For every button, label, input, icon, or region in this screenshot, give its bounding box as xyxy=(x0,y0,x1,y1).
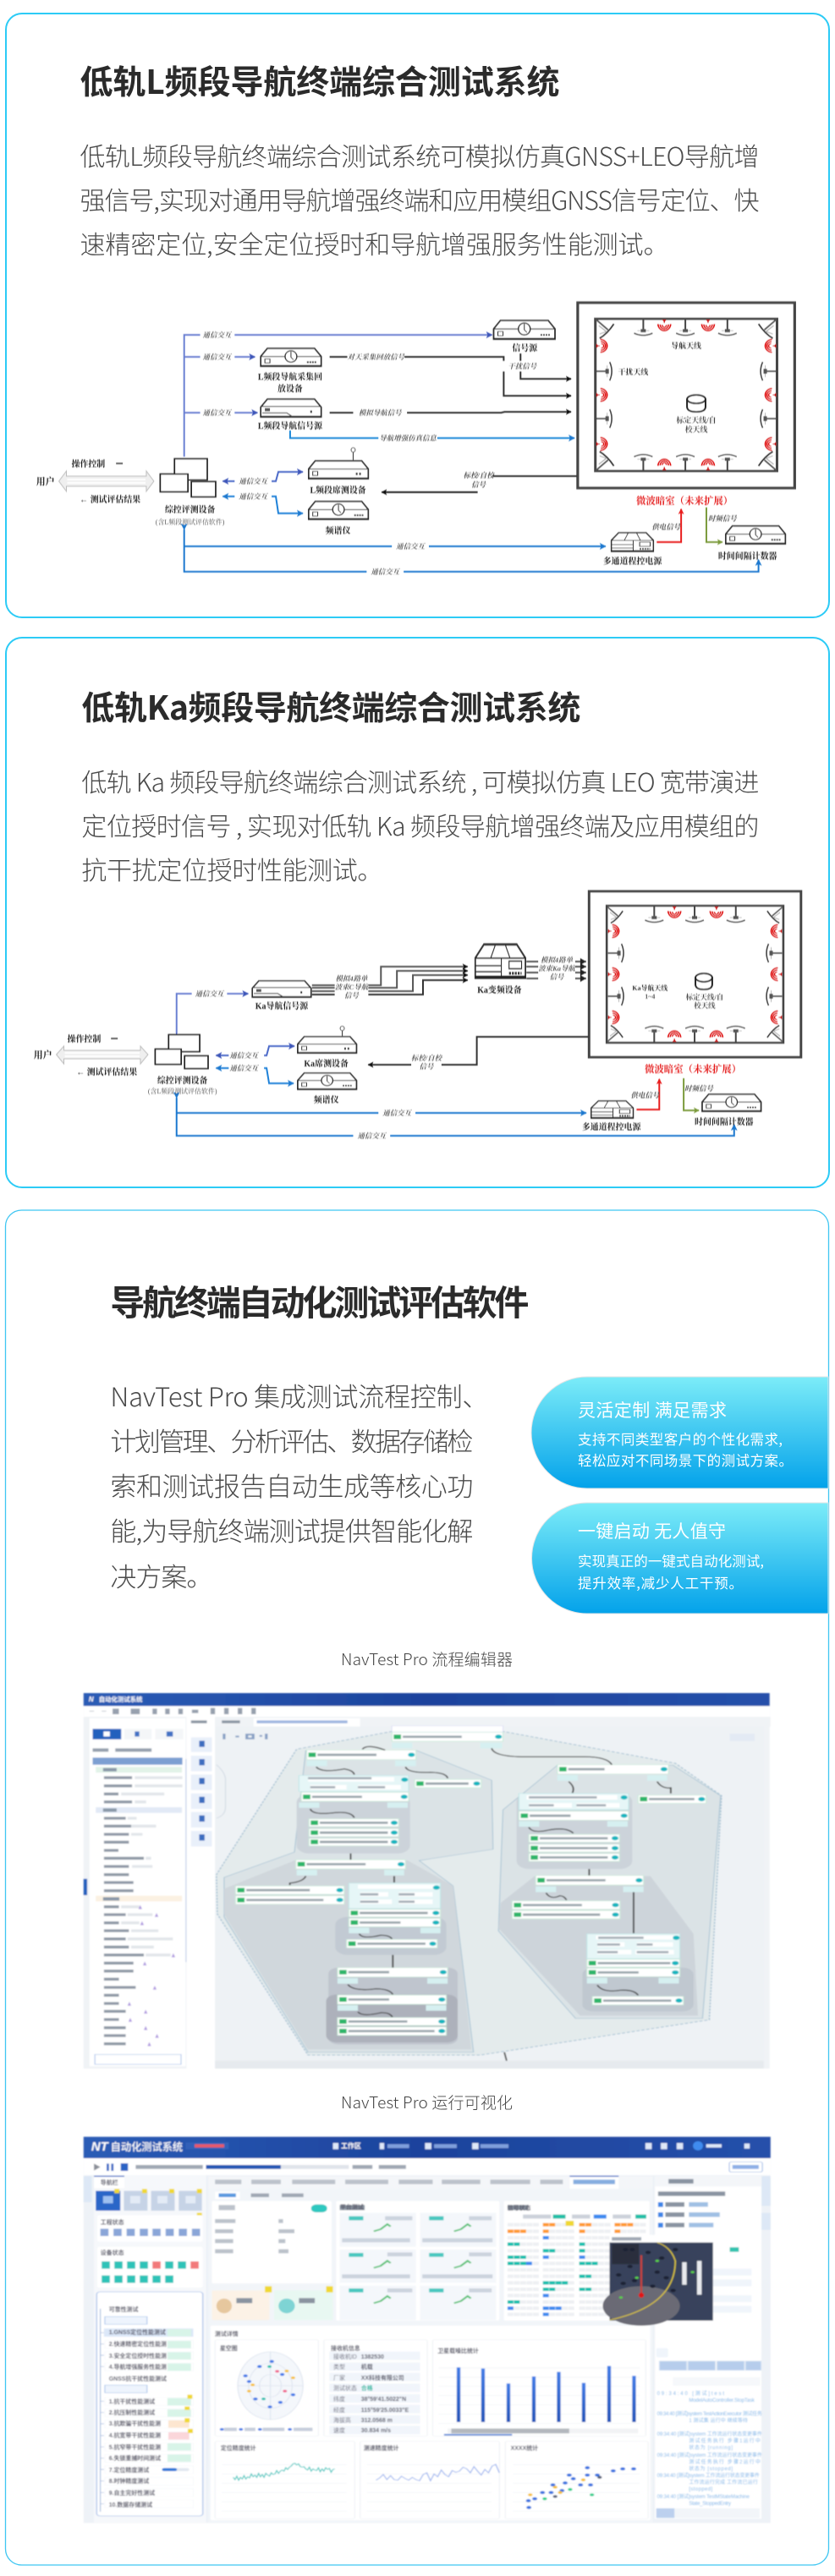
log list: 1 测试集 运行中 继续等待 xyxy=(689,2417,748,2424)
user and double arrow xyxy=(34,1033,148,1077)
line labels: 通信交互 xyxy=(229,1051,260,1060)
line labels: 通信交互 xyxy=(239,477,269,485)
receiver info table: 30.834 m/s xyxy=(361,2428,391,2434)
test plan list: 4.导航增强服务性能测 xyxy=(109,2363,167,2370)
test plan list xyxy=(109,2305,167,2508)
caption: runtime visualization: NavTest Pro 运行可视化 xyxy=(341,2091,513,2113)
callout: flexible customization: 灵活定制 满足需求 xyxy=(578,1397,727,1422)
diagram: L-band system topology xyxy=(36,303,794,577)
device: Ka navigation signal source: Ka导航信号源 xyxy=(255,1000,309,1011)
device: spectrum analyzer xyxy=(298,1073,356,1105)
diagram: Ka-band system topology xyxy=(34,891,801,1141)
line labels: 信号 xyxy=(420,1062,435,1071)
text block: software description: 索和测试报告自动生成等核心功 xyxy=(110,1466,473,1504)
device: integrated control station: (含L频段测试评估软件) xyxy=(148,1087,217,1095)
test plan list: GNSS抗干扰性能测试 xyxy=(109,2375,167,2382)
runtime panel headings xyxy=(101,2179,538,2452)
runtime panel headings: 测试详情 xyxy=(215,2330,239,2338)
line labels: 模拟4路单 xyxy=(541,956,574,964)
device: Ka navigation signal source xyxy=(252,981,311,1011)
device: L-band capture and replay: 放设备 xyxy=(277,383,303,394)
line labels: 通信交互 xyxy=(229,1064,260,1072)
receiver info table: 115°59'25.0033"E xyxy=(361,2407,409,2414)
line labels: 供电信号 xyxy=(631,1091,661,1099)
device: Ka frequency converter xyxy=(475,945,525,995)
device: integrated control station xyxy=(156,458,225,526)
line labels: 通信交互 xyxy=(203,408,233,417)
text block: L-band description: 强信号,实现对通用导航增强终端和应用模组GNSS信号定位、快 xyxy=(80,180,760,217)
text block: software description: 能,为导航终端测试提供智能化解 xyxy=(110,1510,473,1548)
test plan list: 5.抗窄带干扰性能测 xyxy=(109,2443,161,2451)
text block: software description: NavTest Pro 集成测试流程控制、 xyxy=(110,1376,488,1414)
receiver info table: 38°59'41.5022"N xyxy=(361,2396,406,2403)
test plan list: 6.失锁重捕时间测试 xyxy=(109,2454,161,2462)
user and double arrow: ← 测试评估结果 xyxy=(76,1066,137,1077)
text block: Ka-band description: 低轨 Ka 频段导航终端综合测试系统 , 可模拟仿真 LEO 宽带演进 xyxy=(81,762,759,799)
device: integrated control station xyxy=(148,1035,217,1095)
runtime panel headings: 定位精度统计 xyxy=(221,2444,256,2452)
text block: Ka-band description: 定位授时信号 , 实现对低轨 Ka 频段导航增强终端及应用模组的 xyxy=(81,806,759,843)
user and double arrow: ← 测试评估结果 xyxy=(80,494,140,505)
test plan list: 9.自主完好性测试 xyxy=(109,2489,155,2497)
panel: Ka-band system card xyxy=(6,638,829,1187)
runtime panel headings: 导航栏 xyxy=(101,2179,118,2186)
runtime panel headings: 星空图 xyxy=(220,2344,238,2352)
title: software: 导航终端自动化测试评估软件 xyxy=(110,1274,529,1325)
test plan list: 3.抗欺骗干扰性能测 xyxy=(109,2420,161,2427)
chamber xyxy=(589,891,801,1057)
line labels: 信号 xyxy=(471,480,487,489)
runtime panel headings: XXXX统计 xyxy=(511,2444,538,2452)
line labels: 通信交互 xyxy=(195,989,225,998)
log list: [stopped] xyxy=(689,2487,712,2492)
callout: one-click start: 实现真正的一键式自动化测试, xyxy=(578,1550,764,1570)
caption: flow editor: NavTest Pro 流程编辑器 xyxy=(341,1647,513,1670)
text block: L-band description xyxy=(80,136,760,261)
receiver info table: 312.0568 m xyxy=(361,2418,393,2424)
device: L-band seat test equipment xyxy=(309,448,368,496)
user and double arrow: 操作控制 xyxy=(68,1033,101,1044)
device: time interval counter xyxy=(718,526,785,562)
line labels: 标校/自校 xyxy=(411,1054,444,1062)
device: time interval counter: 时间间隔计数器 xyxy=(695,1116,754,1127)
line labels: 通信交互 xyxy=(239,492,269,501)
receiver info table: 合格 xyxy=(361,2384,373,2392)
line labels: 时频信号 xyxy=(684,1084,714,1093)
device: Ka frequency converter: Ka变频设备 xyxy=(477,984,522,995)
text block: Ka-band description xyxy=(81,762,759,887)
editor logo: N xyxy=(89,1696,94,1703)
test plan list: 4.抗宽带干扰性能测 xyxy=(109,2431,161,2439)
test plan list: 3.安全定位授时性能测 xyxy=(109,2352,167,2360)
user and double arrow: 操作控制 xyxy=(71,458,105,469)
receiver info table: 厂家 xyxy=(333,2374,345,2381)
runtime title bar text: 工作区 xyxy=(341,2141,361,2150)
panel: software card xyxy=(5,1210,829,2565)
user and double arrow: 用户 xyxy=(34,1049,52,1061)
test plan list: 1.GNSS定位性能测试 xyxy=(109,2328,166,2336)
text block: software description: 计划管理、分析评估、数据存储检 xyxy=(110,1421,473,1459)
line labels: 模拟4路单 xyxy=(335,974,368,983)
device: L-band navigation signal source: L频段导航信号源 xyxy=(258,420,323,431)
line labels xyxy=(201,330,738,577)
test plan list: 1.抗干扰性能测试 xyxy=(109,2398,155,2405)
label: microwave chamber: 微波暗室（未来扩展） xyxy=(636,495,733,507)
panel: L-band system card xyxy=(6,14,829,617)
line labels: 标校/自校 xyxy=(464,471,496,480)
label: microwave chamber: 微波暗室（未来扩展） xyxy=(645,1063,741,1075)
device: L-band capture and replay: L频段导航采集回 xyxy=(258,371,322,382)
screenshot: flow editor xyxy=(84,1693,771,2069)
callout: flexible customization: 轻松应对不同场景下的测试方案。 xyxy=(578,1450,793,1470)
runtime panel headings: 工程状态 xyxy=(101,2218,124,2226)
device: integrated control station: (含L频段测试评估软件) xyxy=(156,518,225,526)
receiver info table: 经度 xyxy=(333,2406,345,2414)
line labels: 对天采集回放信号 xyxy=(348,353,406,361)
text block: Ka-band description: 抗干扰定位授时性能测试。 xyxy=(81,850,382,887)
line labels: 信号 xyxy=(550,973,565,981)
title: Ka-band system: 低轨Ka频段导航终端综合测试系统 xyxy=(81,682,580,730)
chamber: 标定天线/自 xyxy=(676,415,717,425)
device: signal source xyxy=(493,321,555,354)
device: spectrum analyzer: 频谱仪 xyxy=(326,525,351,536)
test plan list: 8.时钟精度测试 xyxy=(109,2477,149,2485)
runtime title bar text: NT xyxy=(91,2140,110,2154)
device: spectrum analyzer: 频谱仪 xyxy=(314,1094,339,1105)
chamber: 校天线 xyxy=(685,425,707,434)
receiver info table: 纬度 xyxy=(333,2395,345,2403)
text block: L-band description: 低轨L频段导航终端综合测试系统可模拟仿真GNSS+LEO导航增 xyxy=(80,136,760,173)
line labels: 通信交互 xyxy=(357,1132,387,1140)
chamber: Ka导航天线 xyxy=(632,984,667,992)
line labels: 时频信号 xyxy=(708,514,738,523)
screenshot: runtime visualization xyxy=(84,2137,771,2523)
device: spectrum analyzer xyxy=(309,501,368,536)
text block: software description: 决方案。 xyxy=(110,1556,212,1594)
runtime panel headings: 卫星载噪比统计 xyxy=(437,2347,479,2354)
log list: 测试任务执行 步骤1运行中 xyxy=(689,2437,761,2444)
chamber: 标定天线/自 xyxy=(686,993,723,1001)
receiver info table xyxy=(333,2353,409,2434)
text block: software description xyxy=(110,1376,488,1594)
log list: 09:34:40 [测试]system 工作流运行状态变更事件 xyxy=(657,2431,762,2437)
log list: 状态为 [stopped] xyxy=(689,2465,733,2472)
device: programmable power supply xyxy=(582,1101,641,1132)
test plan list: 可靠性测试 xyxy=(109,2305,138,2313)
log list xyxy=(657,2390,762,2507)
chamber xyxy=(578,303,794,488)
connection lines xyxy=(177,958,734,1136)
receiver info table: 1382530 xyxy=(361,2354,384,2360)
line labels: 通信交互 xyxy=(382,1109,413,1117)
line labels: 信号 xyxy=(344,991,360,1000)
line labels: 波束C导航 xyxy=(335,983,370,991)
line labels: 波束Ka导航 xyxy=(538,964,576,973)
user and double arrow xyxy=(36,458,154,505)
device: programmable power supply xyxy=(603,533,662,567)
line labels: 导航增强仿真信息 xyxy=(379,434,437,442)
callout: one-click start: 一键启动 无人值守 xyxy=(578,1518,726,1543)
receiver info table: 接收机ID xyxy=(333,2353,357,2360)
chamber: 导航天线 xyxy=(671,341,701,350)
device: time interval counter: 时间间隔计数器 xyxy=(718,551,777,562)
test plan list: 7.定位精度测试 xyxy=(109,2466,149,2474)
line labels: 通信交互 xyxy=(203,353,233,361)
runtime panel headings: 测速精度统计 xyxy=(364,2444,398,2452)
device: time interval counter xyxy=(695,1094,761,1127)
log list: 09:34:40 [测试]system TestActionExecutor 测试任务 xyxy=(657,2410,762,2417)
line labels: 干扰信号 xyxy=(508,362,538,370)
device: L-band capture and replay xyxy=(258,348,322,394)
line labels: 通信交互 xyxy=(371,567,401,576)
log list: 09:34:40 [测试]system TestMStateMachine xyxy=(657,2493,750,2500)
device: integrated control station: 综控评测设备 xyxy=(157,1075,208,1086)
log list: 状态为 [running] xyxy=(689,2444,733,2451)
test plan list: 10.数据存储测试 xyxy=(109,2501,152,2508)
receiver info table: XX科技有限公司 xyxy=(361,2374,404,2381)
callout: flexible customization: 支持不同类型客户的个性化需求, xyxy=(578,1428,783,1449)
log list: ModelAutoController.StopTask xyxy=(689,2398,755,2403)
device: Ka seat test equipment xyxy=(298,1027,356,1069)
line labels: 模拟导航信号 xyxy=(359,408,403,417)
receiver info table: 速度 xyxy=(333,2426,345,2434)
title: L-band system: 低轨L频段导航终端综合测试系统 xyxy=(80,57,560,104)
receiver info table: 测试状态 xyxy=(333,2384,357,2392)
line labels xyxy=(192,954,714,1141)
runtime panel headings: 信号状态 xyxy=(508,2204,531,2212)
log list: 测试任务执行 步骤2运行中 xyxy=(689,2458,761,2465)
receiver info table: 类型 xyxy=(333,2363,345,2370)
runtime panel headings: 接收机信息 xyxy=(331,2344,360,2352)
runtime panel headings: 平台测试 xyxy=(340,2203,364,2211)
runtime title bar text: 自动化测试系统 xyxy=(111,2140,183,2153)
callout: flexible customization xyxy=(531,1377,828,1488)
line labels: 通信交互 xyxy=(396,542,426,551)
callout: one-click start xyxy=(531,1503,828,1614)
callout: one-click start: 提升效率,减少人工干预。 xyxy=(578,1572,743,1592)
test plan list: 2.快速精密定位性能测 xyxy=(109,2340,167,2348)
test plan list: 2.抗压制性能测试 xyxy=(109,2409,155,2416)
log list: State_StoppedEntry xyxy=(689,2502,731,2507)
line labels: 供电信号 xyxy=(651,523,682,531)
device: L-band navigation signal source xyxy=(258,399,323,431)
device: signal source: 信号源 xyxy=(512,343,538,354)
device: programmable power supply: 多通道程控电源 xyxy=(582,1121,641,1132)
editor title text: 自动化测试系统 xyxy=(99,1695,143,1703)
log list: 09:34:40 [测试]system 工作流运行状态变更事件 xyxy=(657,2472,760,2479)
chamber: 干扰天线 xyxy=(618,367,648,376)
log list: 09:34:40 [测试]test xyxy=(657,2390,724,2397)
log list: 工作流运行完成 工作流已运行 xyxy=(689,2479,758,2486)
log list: 09:34:40 [测试]system 工作流运行状态变更事件 xyxy=(657,2452,762,2458)
device: programmable power supply: 多通道程控电源 xyxy=(603,556,662,567)
runtime panel headings: 设备状态 xyxy=(101,2249,124,2256)
chamber: 校天线 xyxy=(694,1001,716,1010)
line labels: 通信交互 xyxy=(203,331,233,339)
device: L-band seat test equipment: L频段席测设备 xyxy=(310,485,366,496)
runtime title bar text xyxy=(91,2140,361,2154)
connection lines xyxy=(184,335,759,572)
device: Ka seat test equipment: Ka席测设备 xyxy=(304,1058,349,1069)
device: integrated control station: 综控评测设备 xyxy=(165,504,215,515)
receiver info table: 海拔高 xyxy=(333,2416,351,2424)
receiver info table: 机载 xyxy=(361,2363,373,2370)
text block: L-band description: 速精密定位,安全定位授时和导航增强服务性能测试。 xyxy=(80,224,668,261)
chamber: 1~4 xyxy=(645,993,655,1000)
user and double arrow: 用户 xyxy=(36,475,55,487)
